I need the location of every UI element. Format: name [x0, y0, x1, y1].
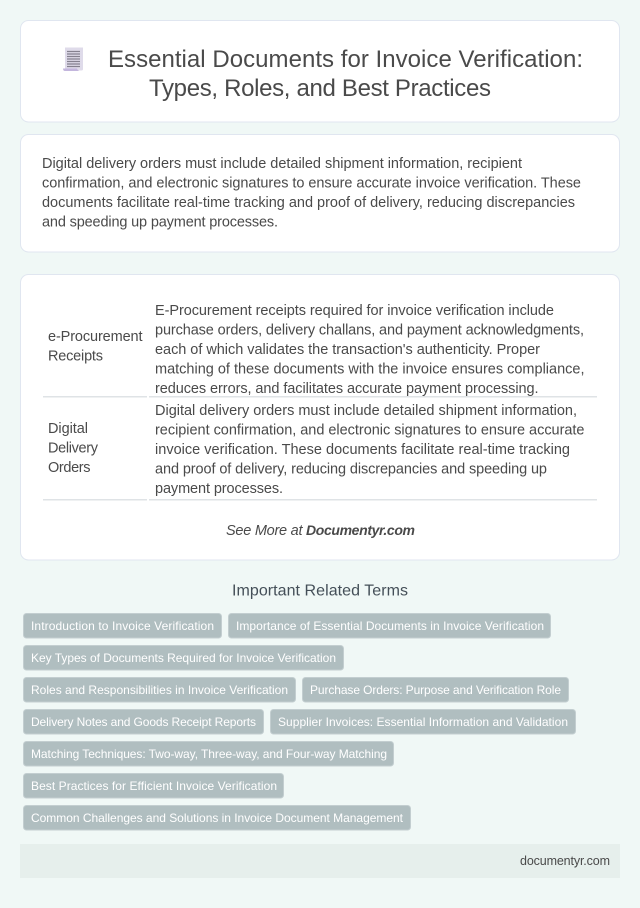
icon: document receipt — [63, 48, 83, 71]
tag list: Purchase Orders: Purpose and Verification Role — [310, 683, 561, 697]
tag list: Key Types of Documents Required for Invoice Verification — [31, 651, 336, 665]
footer site name: documentyr.com — [520, 854, 610, 868]
title: Types, Roles, and Best Practices — [149, 75, 491, 102]
panel: summary text: documents facilitate real-time tracking and proof of delivery, reducing discrepancies — [42, 195, 575, 211]
row: e-Procurement Receipts — [48, 303, 584, 397]
panel: summary text: Digital delivery orders must include detailed shipment information, recipient — [42, 156, 522, 172]
tag list: Common Challenges and Solutions in Invoice Document Management — [31, 811, 404, 825]
tag list: Delivery Notes and Goods Receipt Reports — [31, 715, 256, 729]
row: Digital Delivery Orders: Digital delivery orders must include detailed shipment information, — [155, 403, 577, 419]
panel: document table — [20, 274, 620, 560]
row: Digital Delivery Orders: and proof of delivery, reducing discrepancies and speeding up — [155, 462, 547, 478]
footer bar — [20, 844, 620, 878]
panel: summary text — [20, 134, 620, 252]
row: e-Procurement Receipts: each of which validates the transaction's authenticity. Proper — [155, 342, 540, 358]
row: Digital Delivery Orders: Orders — [48, 460, 90, 476]
see more link: See More at — [226, 523, 303, 539]
tag list: Introduction to Invoice Verification — [31, 619, 214, 633]
title: Essential Documents for Invoice Verification: — [108, 46, 583, 73]
row: e-Procurement Receipts: e-Procurement — [48, 329, 142, 345]
row: e-Procurement Receipts: matching of these documents with the invoice ensures compliance, — [155, 362, 584, 378]
row: Digital Delivery Orders: Digital — [48, 421, 88, 437]
panel: summary text: and speeding up payment processes. — [42, 214, 278, 230]
row: Digital Delivery Orders — [48, 403, 584, 497]
tag list — [24, 614, 576, 830]
row: e-Procurement Receipts: reduces errors, and facilitates accurate payment processing. — [155, 381, 538, 397]
heading: Important Related Terms: Important Related Terms — [232, 582, 408, 600]
panel: title header — [20, 20, 620, 122]
title — [108, 46, 583, 102]
row: Digital Delivery Orders: invoice verification. These documents facilitate real-time tracking — [155, 442, 570, 458]
tag list: Best Practices for Efficient Invoice Verification — [31, 779, 277, 793]
row: e-Procurement Receipts: E-Procurement receipts required for invoice verification include — [155, 303, 554, 319]
tag list: Importance of Essential Documents in Invoice Verification — [236, 619, 544, 633]
row: Digital Delivery Orders: recipient confirmation, and electronic signatures to ensure accurate — [155, 422, 584, 438]
see more link — [226, 522, 415, 539]
tag list: Supplier Invoices: Essential Information and Validation — [278, 715, 568, 729]
tag list: Matching Techniques: Two-way, Three-way, and Four-way Matching — [31, 747, 387, 761]
row: Digital Delivery Orders: Delivery — [48, 440, 99, 456]
row: e-Procurement Receipts: purchase orders, delivery challans, and payment acknowledgments, — [155, 322, 584, 338]
panel: summary text: confirmation, and electronic signatures to ensure accurate invoice verification. These — [42, 176, 581, 192]
row: e-Procurement Receipts: Receipts — [48, 348, 103, 364]
tag list: Roles and Responsibilities in Invoice Verification — [31, 683, 288, 697]
see more link: Documentyr.com — [306, 522, 415, 538]
row: Digital Delivery Orders: payment processes. — [155, 481, 283, 497]
